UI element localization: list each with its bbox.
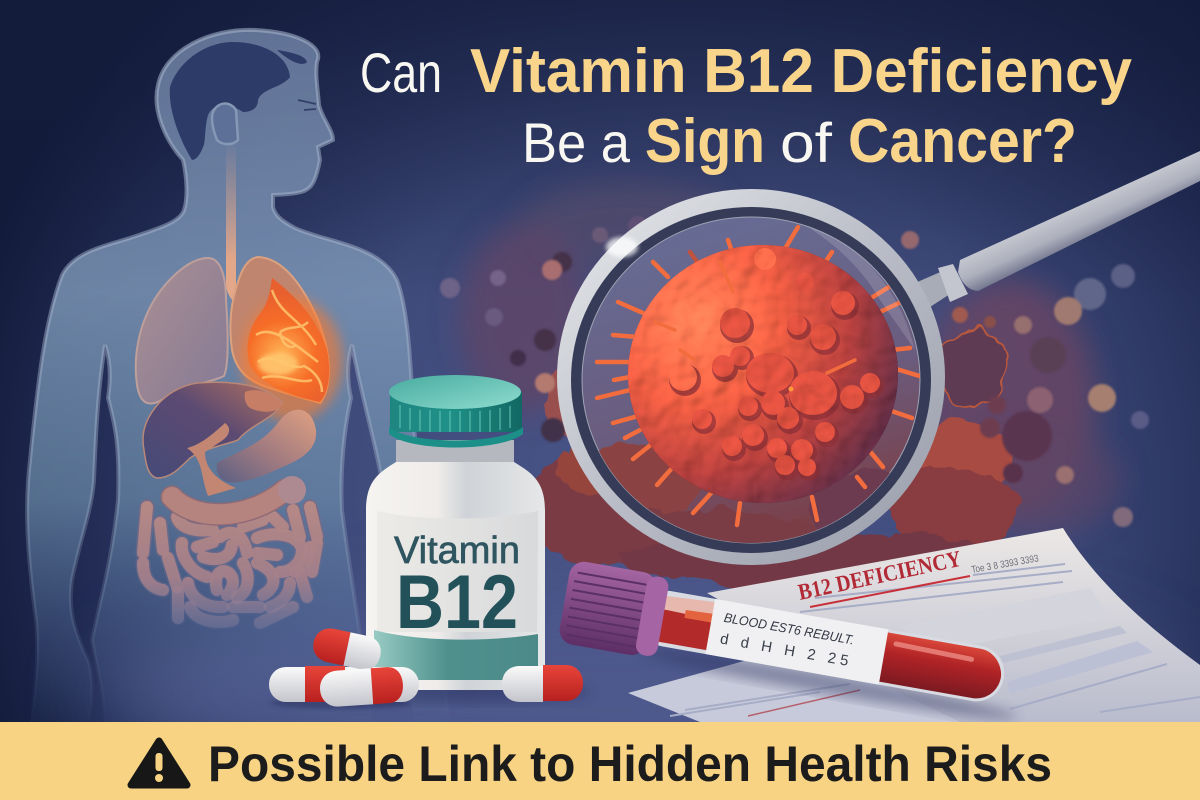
tube glass — [635, 586, 1009, 706]
lower sheet — [628, 640, 1200, 722]
bottle text: B12: B12 — [396, 560, 518, 645]
red tissue masses — [525, 330, 1020, 588]
bokeh cells — [440, 216, 1149, 527]
background cancer tissue — [440, 183, 1149, 588]
title: of — [780, 111, 832, 174]
duodenum — [187, 423, 236, 496]
title: Vitamin B12 Deficiency — [470, 37, 1133, 106]
ring — [557, 189, 945, 565]
bottle neck — [396, 440, 514, 470]
human body silhouette — [27, 30, 450, 722]
gallbladder — [245, 390, 283, 412]
magnified tissue — [599, 441, 890, 543]
icon: warning triangle — [131, 741, 187, 785]
hair — [170, 42, 290, 160]
spikes — [597, 227, 923, 525]
lens sheen — [808, 226, 915, 350]
ring flare — [606, 237, 638, 257]
eye and brow — [298, 100, 316, 110]
banner text: Possible Link to Hidden Health Risks — [208, 736, 1052, 792]
cell surface bumps — [669, 248, 880, 476]
trachea — [231, 150, 280, 332]
small intestine — [143, 507, 317, 623]
vitamin B12 bottle — [350, 375, 590, 702]
left lung — [136, 258, 228, 404]
bottle text: Vitamin: Vitamin — [394, 530, 520, 572]
capsules — [269, 625, 583, 709]
right lung — [230, 257, 329, 403]
spikes on the cell face — [655, 262, 855, 373]
title: Sign — [645, 107, 765, 176]
blood — [645, 605, 715, 651]
capsule top — [310, 625, 384, 673]
title: Be a — [522, 111, 631, 174]
transverse colon — [172, 476, 306, 514]
handle — [915, 151, 1200, 307]
teal strip — [374, 630, 538, 680]
bottle label — [377, 511, 538, 632]
smoky haze — [460, 183, 1120, 535]
tube shadow — [641, 641, 1019, 727]
glowing tumour — [242, 278, 342, 422]
lens — [582, 217, 920, 543]
title: Can — [360, 41, 442, 104]
report reference text: Toe 3 8 3393 3393 — [971, 553, 1040, 576]
title — [360, 37, 1133, 176]
label text: BLOOD EST6 REBULT. — [723, 610, 855, 648]
capsule front — [319, 666, 404, 708]
lab report — [628, 528, 1200, 722]
purple cap — [557, 559, 670, 659]
capsule right — [502, 665, 583, 702]
hair front — [277, 50, 307, 64]
blood test tube — [557, 559, 1031, 727]
magnifying glass — [557, 151, 1200, 570]
heading: B12 Deficiency: B12 DEFICIENCY — [796, 546, 964, 605]
label codes: d d H H 2 25 — [719, 631, 850, 670]
lens contents — [594, 224, 920, 543]
upper sheet — [707, 528, 1200, 722]
label — [705, 599, 888, 685]
stomach — [217, 410, 316, 482]
inner dark band — [571, 207, 931, 553]
liver — [143, 382, 283, 478]
bottle shadow — [350, 682, 590, 702]
body outline — [27, 30, 450, 722]
bottom banner — [0, 722, 1200, 800]
ear — [212, 104, 238, 144]
capsule back — [269, 666, 419, 709]
title: Cancer? — [848, 107, 1077, 176]
bottle cap — [389, 375, 523, 448]
bump shadows — [669, 292, 884, 481]
bottle body — [366, 462, 545, 690]
cancer cell — [628, 245, 898, 503]
